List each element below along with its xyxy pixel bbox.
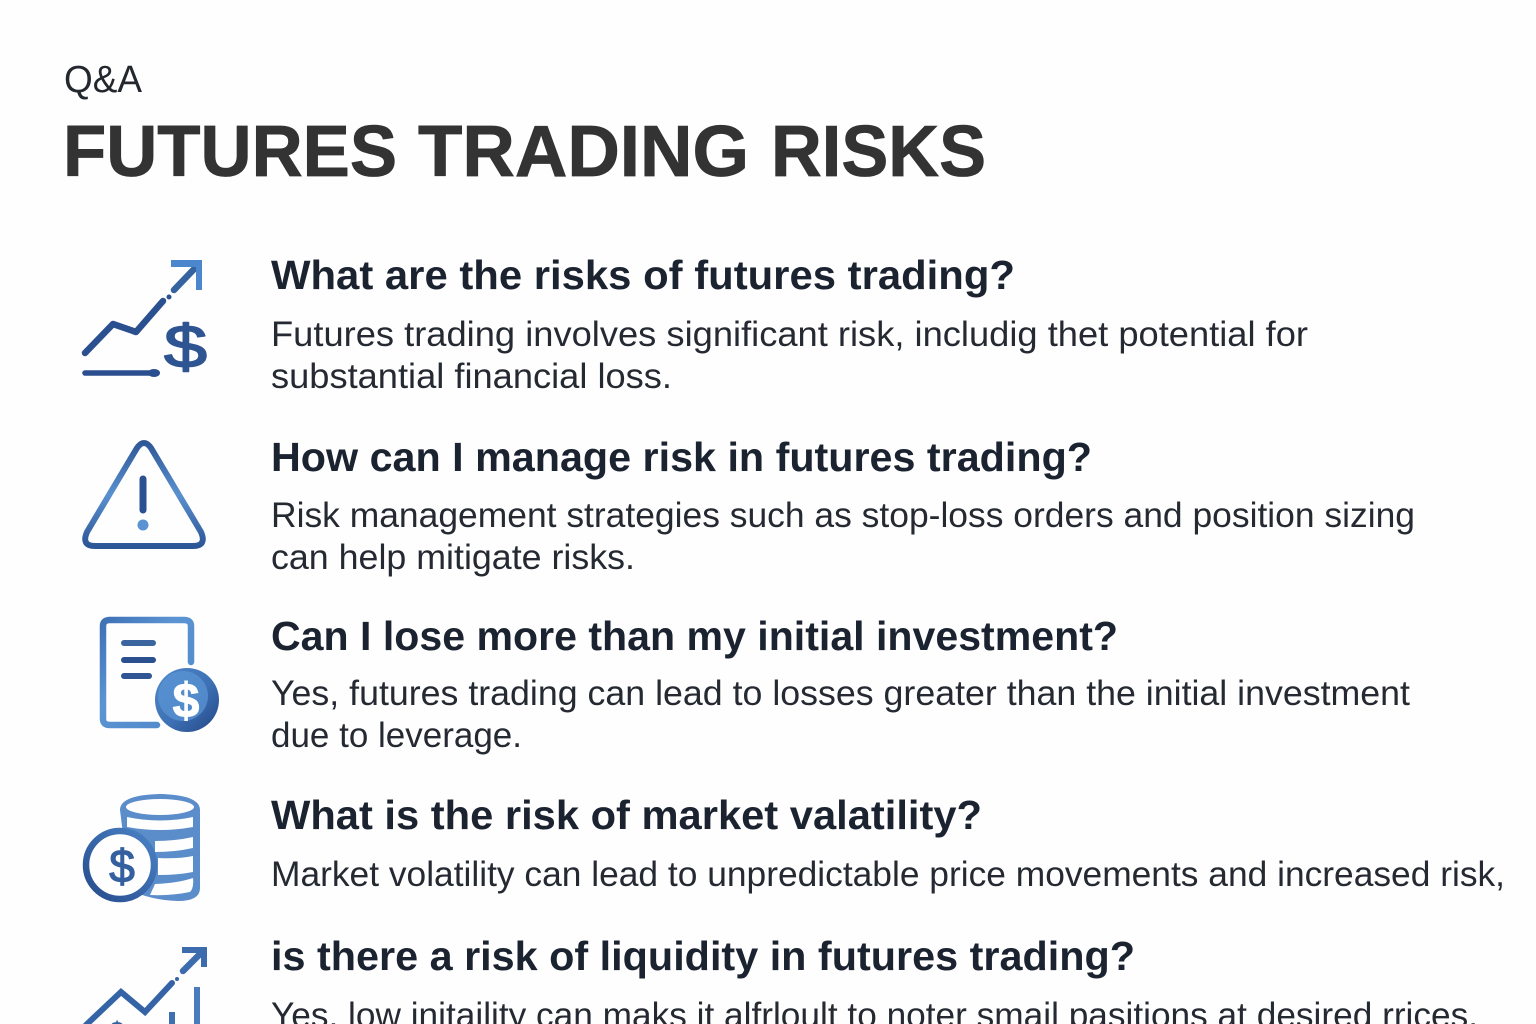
icon: rising chart with dollar sign: $ [164, 313, 207, 380]
question heading: What is the risk of market valatility? [271, 792, 982, 838]
answer text: substantial financial loss. [271, 357, 672, 396]
title: TRADING [418, 112, 749, 192]
panel: question 2 [85, 434, 1415, 577]
answer text: due to leverage. [271, 716, 522, 755]
answer text: Yes, futures trading can lead to losses greater than the initial investment [271, 674, 1410, 713]
answer text [271, 674, 1410, 755]
icon: rising chart with dollar sign [85, 260, 207, 380]
label: Q&A: Q&A [64, 59, 143, 101]
answer text [271, 496, 1415, 577]
answer text [271, 315, 1308, 396]
panel: question 3 [103, 613, 1410, 755]
title: FUTURES [63, 112, 397, 192]
answer text: Market volatility can lead to unpredictable price movements and increased risk, [271, 855, 1505, 894]
question heading: What are the risks of futures trading? [271, 252, 1015, 298]
question heading: Can I lose more than my initial investment? [271, 613, 1118, 659]
icon: warning triangle [85, 443, 203, 546]
panel: question 1 [85, 252, 1308, 396]
question heading: How can I manage risk in futures trading? [271, 434, 1092, 480]
title: RISKS [771, 112, 986, 192]
icon: coin stack: $ [109, 840, 135, 892]
answer text: Risk management strategies such as stop-loss orders and position sizing [271, 496, 1415, 535]
icon: document with dollar coin [103, 620, 219, 732]
answer text: can help mitigate risks. [271, 538, 635, 577]
icon: rising chart with bars [86, 947, 207, 1024]
panel: question 4 [86, 792, 1505, 901]
title [63, 112, 986, 192]
question heading: is there a risk of liquidity in futures trading? [271, 933, 1135, 979]
icon: coin stack [86, 794, 200, 901]
answer text: Futures trading involves significant risk, includig thet potential for [271, 315, 1308, 354]
panel: question 5 [86, 933, 1478, 1024]
icon: document with dollar coin: $ [173, 675, 200, 728]
